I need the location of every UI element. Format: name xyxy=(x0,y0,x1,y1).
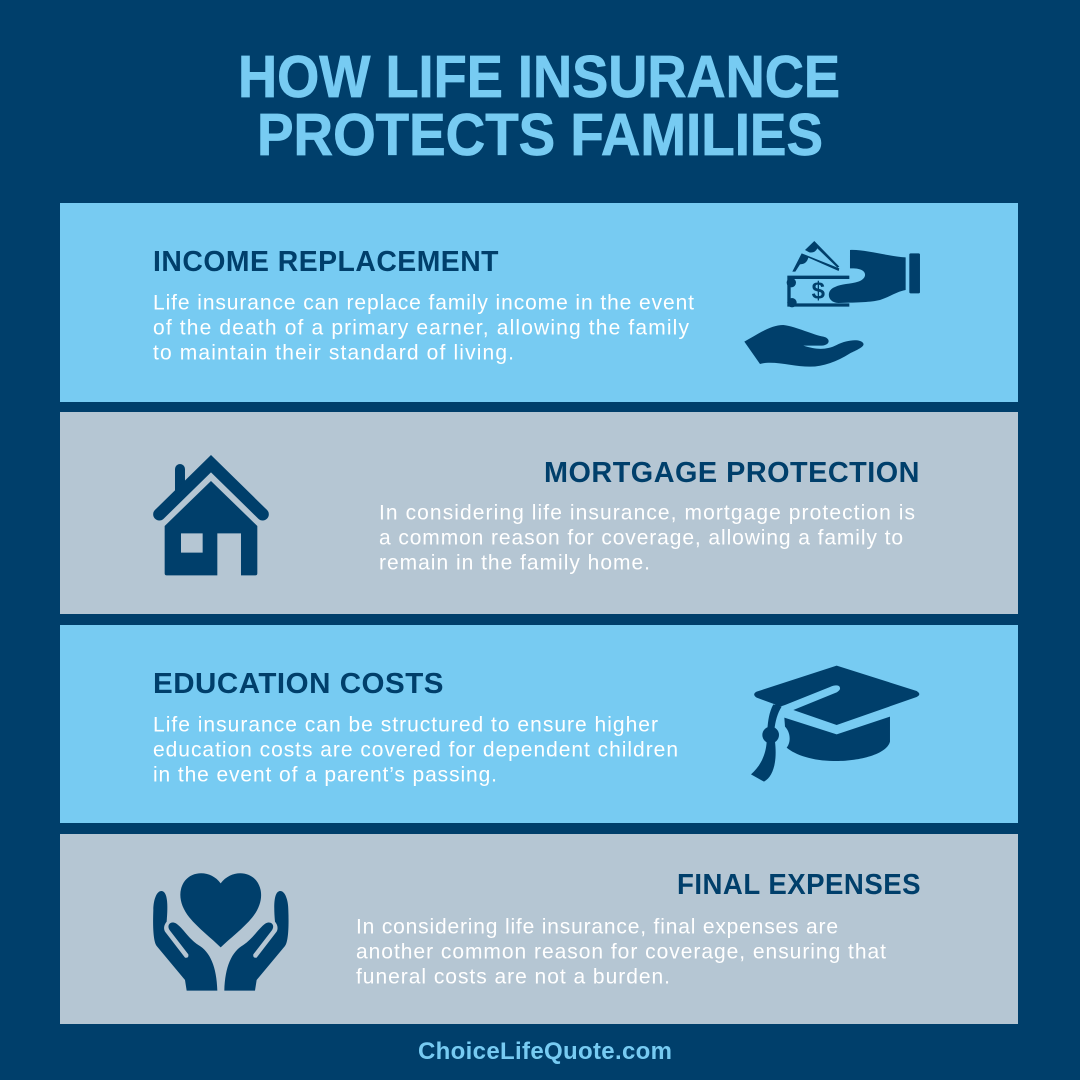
icon: house xyxy=(159,464,263,575)
title xyxy=(238,44,840,168)
text block: mortgage protection: a common reason for coverage, allowing a family to xyxy=(379,526,903,550)
heading: income replacement: INCOME REPLACEMENT xyxy=(153,246,499,278)
text block: income replacement: of the death of a primary earner, allowing the family xyxy=(153,316,690,340)
panel: mortgage protection xyxy=(60,412,1018,614)
text block: education costs: Life insurance can be structured to ensure higher xyxy=(153,714,658,736)
heading: education costs: EDUCATION COSTS xyxy=(153,668,444,700)
panel: education costs xyxy=(60,625,1018,823)
text block: final expenses xyxy=(356,916,886,988)
text block: education costs: in the event of a parent’s passing. xyxy=(153,764,497,786)
text block: mortgage protection: remain in the family home. xyxy=(379,552,650,574)
text block: mortgage protection: In considering life insurance, mortgage protection is xyxy=(379,502,915,524)
text block: final expenses: another common reason for coverage, ensuring that xyxy=(356,940,886,964)
title: PROTECTS FAMILIES xyxy=(257,102,823,168)
icon: hands holding heart xyxy=(153,873,289,991)
panel: income replacement xyxy=(60,203,1018,402)
icon: hands exchanging money xyxy=(744,241,920,367)
heading: final expenses: FINAL EXPENSES xyxy=(677,869,921,901)
footer website: ChoiceLifeQuote.com xyxy=(418,1038,672,1065)
text block: income replacement: to maintain their standard of living. xyxy=(153,342,514,364)
icon: hands exchanging money: $ xyxy=(812,278,825,305)
title: HOW LIFE INSURANCE xyxy=(238,44,840,110)
panel: final expenses xyxy=(60,834,1018,1024)
text block: mortgage protection xyxy=(379,502,915,574)
heading: mortgage protection: MORTGAGE PROTECTION xyxy=(544,457,920,489)
text block: final expenses: In considering life insurance, final expenses are xyxy=(356,916,838,938)
text block: income replacement xyxy=(153,292,694,364)
text block: education costs xyxy=(153,714,678,786)
text block: income replacement: Life insurance can replace family income in the event xyxy=(153,292,694,314)
icon: graduation cap xyxy=(751,666,919,782)
text block: education costs: education costs are covered for dependent children xyxy=(153,738,678,762)
text block: final expenses: funeral costs are not a burden. xyxy=(356,966,670,988)
